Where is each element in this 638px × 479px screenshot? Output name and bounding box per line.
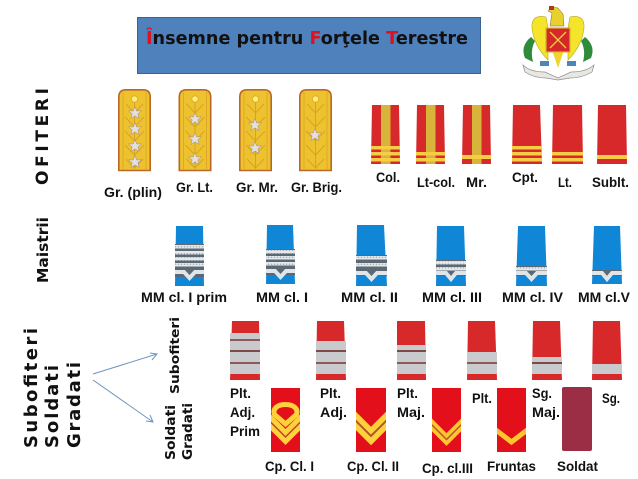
label: Soldati Gradati: Gradati — [181, 403, 196, 460]
label: Sg. Maj.: Maj. — [532, 405, 560, 420]
label: Subl.: Sublt. — [592, 175, 629, 190]
label: Plt. Adj. Prim: Adj. — [230, 405, 255, 420]
title — [138, 18, 480, 74]
epaulette: Plt. Adj. Prim — [230, 321, 260, 380]
label: Mr.: Mr. — [466, 175, 487, 190]
epaulette: Subl. — [597, 105, 627, 164]
epaulette: MM cl. IV — [516, 226, 547, 286]
epaulette: Mr. — [462, 105, 491, 164]
label: MM cl. IV: MM cl. IV — [502, 290, 563, 305]
label: MM cl. I prim: MM cl. I prim — [141, 290, 227, 305]
epaulette: Gr. Brig. — [300, 90, 331, 170]
label: Cpt.: Cpt. — [512, 170, 538, 185]
label: Subofiteri: Subofiteri — [167, 317, 182, 394]
panel: maistri ranks — [141, 225, 630, 305]
section label: Subofiteri Soldati Gradati: Subofiteri — [21, 328, 42, 448]
panel: subofiteri ranks — [230, 321, 622, 439]
label: Gr. Mr.: Gr. Mr. — [236, 180, 278, 195]
epaulette: Lt. — [552, 105, 583, 164]
label: Gr. Lt.: Gr. Lt. — [176, 180, 213, 195]
epaulette: Fruntas — [497, 388, 526, 452]
label: Cp. cl.III: Cp. cl.III — [422, 461, 473, 476]
label: Plt. Maj.: Maj. — [397, 405, 425, 420]
label: Plt. Maj.: Plt. — [397, 386, 418, 401]
epaulette: Gr. (plin) — [119, 90, 150, 170]
epaulette: Plt. Maj. — [397, 321, 426, 380]
epaulette: MM cl.V — [592, 226, 622, 284]
label: Plt. Adj. Prim — [230, 386, 260, 439]
arrow: to Subofiteri — [93, 353, 157, 374]
section label: Maistrii: Maistrii — [34, 217, 52, 283]
section label: Ofiteri: OFITERI — [33, 88, 53, 185]
label: Fruntas: Fruntas — [487, 459, 536, 474]
label: MM cl. III: MM cl. III — [422, 290, 482, 305]
label: Cp. Cl. II: Cp. Cl. II — [347, 459, 399, 474]
epaulette: Plt. Adj. — [316, 321, 346, 380]
label: Gr. (plin): Gr. (plin) — [104, 185, 162, 200]
epaulette: Col. — [371, 105, 400, 164]
label: Soldati Gradati — [164, 403, 196, 460]
label: Plt. Adj. — [320, 386, 347, 420]
epaulette: Cpt. — [512, 105, 542, 164]
label: Plt. Adj.: Adj. — [320, 405, 347, 420]
epaulette: Plt. — [467, 321, 497, 380]
label: Soldat: Soldat — [557, 459, 598, 474]
epaulette: MM cl. III — [436, 226, 466, 286]
epaulette: Sg. — [592, 321, 622, 380]
epaulette: Gr. Lt. — [179, 90, 211, 170]
label: Sg.: Sg. — [602, 391, 620, 406]
epaulette: Gr. Mr. — [240, 90, 271, 170]
panel: general ranks — [104, 90, 342, 200]
label: Gr. Brig.: Gr. Brig. — [291, 180, 342, 195]
epaulette: Cp. Cl. I — [271, 388, 300, 452]
label: Sg. Maj. — [532, 386, 560, 420]
label: Plt. Adj. Prim: Plt. — [230, 386, 251, 401]
label: MM cl. I: MM cl. I — [256, 290, 308, 305]
label: MM cl. II: MM cl. II — [341, 290, 398, 305]
label: Soldati Gradati: Soldati — [164, 405, 179, 460]
label: MM cl.V: MM cl.V — [578, 290, 630, 305]
section label: Subofiteri Soldati Gradati — [21, 328, 85, 448]
epaulette: Lt-col. — [416, 105, 445, 164]
label: Lt-col.: Lt-col. — [417, 175, 455, 190]
label: Plt.: Plt. — [472, 391, 492, 406]
label: Lt.: Lt. — [558, 175, 572, 190]
label: Cp. Cl. I: Cp. Cl. I — [265, 459, 314, 474]
label: Plt. Adj. Prim: Prim — [230, 424, 260, 439]
label: Col.: Col. — [376, 170, 400, 185]
epaulette: Cp. Cl. II — [356, 388, 386, 452]
epaulette: MM cl. I — [266, 225, 295, 284]
arrow: to Soldati Gradati — [93, 380, 153, 422]
epaulette: Cp. cl.III — [432, 388, 461, 452]
section label: Subofiteri Soldati Gradati: Gradati — [64, 362, 85, 448]
section label: Subofiteri Soldati Gradati: Soldati — [42, 365, 63, 448]
epaulette: MM cl. I prim — [175, 226, 204, 286]
epaulette: Sg. Maj. — [532, 321, 562, 380]
panel: officer ranks — [371, 105, 629, 190]
label: Plt. Adj.: Plt. — [320, 386, 341, 401]
label: Plt. Maj. — [397, 386, 425, 420]
title: Însemne pentru Forţele Terestre — [146, 27, 468, 49]
icon: coat of arms — [523, 6, 594, 80]
epaulette: MM cl. II — [356, 225, 387, 286]
label: Sg. Maj.: Sg. — [532, 386, 552, 401]
panel: soldati gradati ranks — [265, 387, 598, 476]
epaulette: Soldat — [562, 387, 592, 451]
